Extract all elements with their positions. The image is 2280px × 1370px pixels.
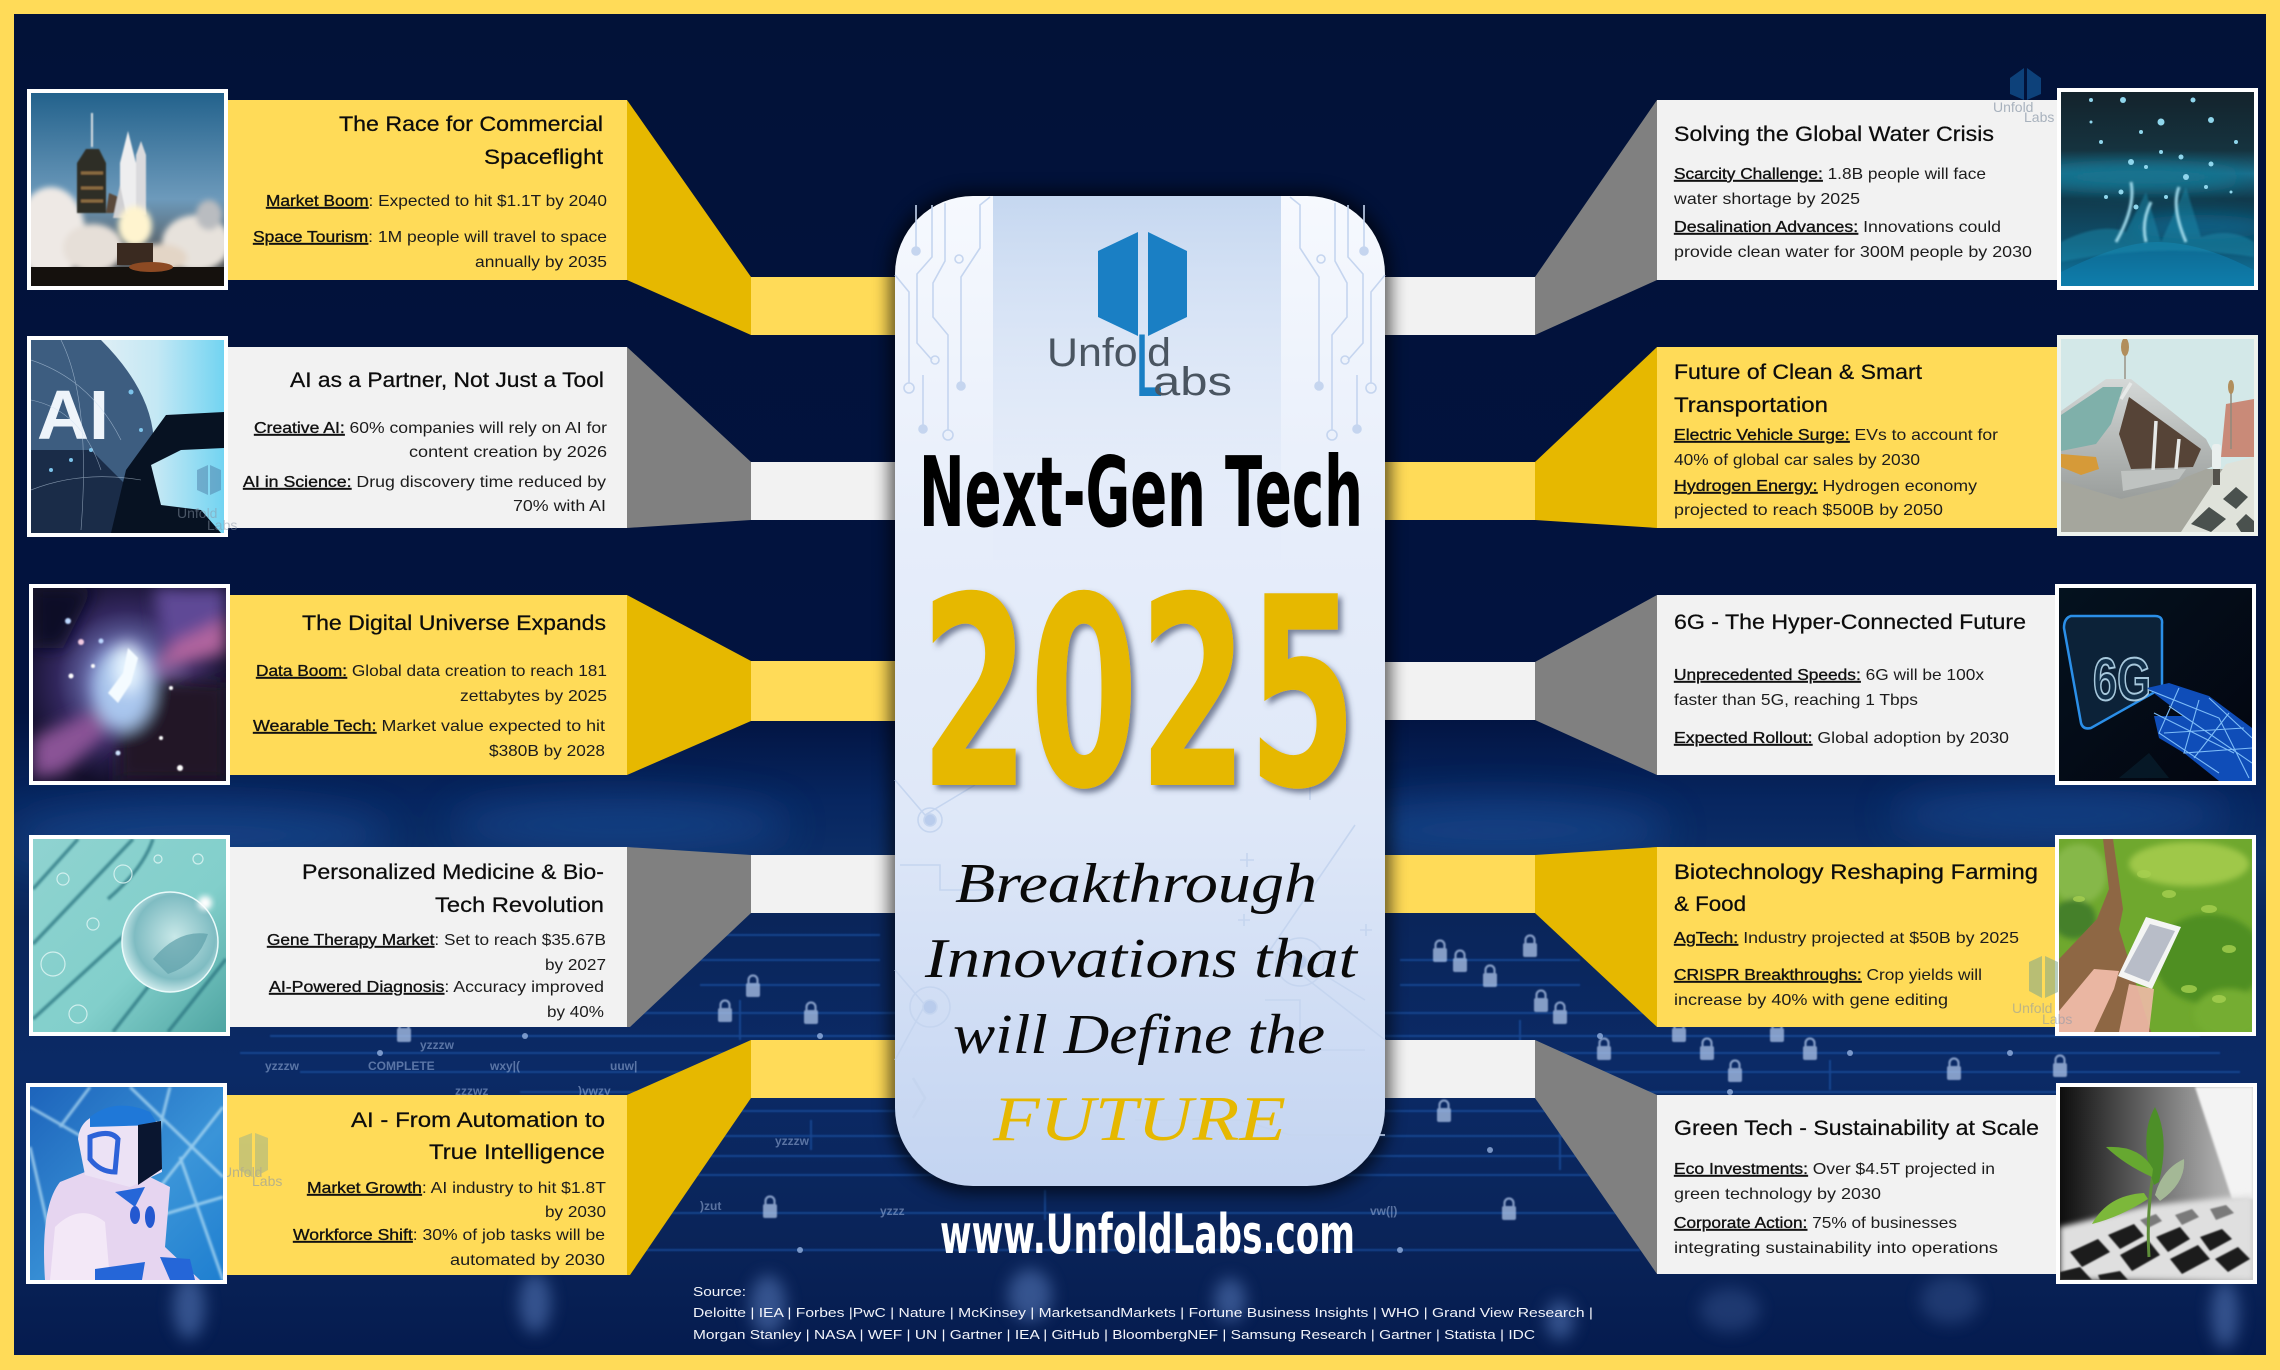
body text: faster than 5G, reaching 1 Tbps xyxy=(1674,692,1918,709)
photo: robot xyxy=(26,1083,227,1284)
body text: CRISPR Breakthroughs: Crop yields will xyxy=(1674,967,1982,984)
watermark xyxy=(2012,956,2072,1027)
photo: nebula xyxy=(29,584,230,785)
website URL: www.UnfoldLabs.com xyxy=(940,1203,1355,1266)
source credits: Deloitte | IEA | Forbes |PwC | Nature | McKinsey | MarketsandMarkets | Fortune Business Insights | WHO | Grand View Research | xyxy=(693,1305,1593,1320)
body text: Gene Therapy Market : Set to reach $35.67B xyxy=(267,932,606,949)
text panel xyxy=(1657,1095,2058,1274)
circuit decoration xyxy=(895,197,1385,1135)
body text: Workforce Shift : 30% of job tasks will be xyxy=(293,1227,605,1244)
heading xyxy=(351,1109,605,1164)
tagline: FUTURE xyxy=(992,1083,1286,1154)
panel shadow xyxy=(889,190,1391,1194)
left item 4: personalized medicine xyxy=(29,835,901,1036)
panel card xyxy=(895,196,1385,1186)
body text: by 2030 xyxy=(545,1204,606,1221)
heading: Biotechnology Reshaping Farming xyxy=(1674,861,2038,884)
photo: AI handshake: AI xyxy=(37,376,109,454)
body text xyxy=(1674,930,2019,1009)
logo wordmark: Unfold xyxy=(1047,331,1171,375)
connector funnel xyxy=(1535,347,1657,528)
body text xyxy=(253,663,607,760)
text panel xyxy=(226,100,627,280)
central panel xyxy=(889,190,1391,1194)
connector funnel xyxy=(627,1040,751,1275)
connector funnel xyxy=(627,847,751,1027)
connector bar xyxy=(1380,855,1535,913)
logo xyxy=(1047,232,1232,414)
page background with network pattern: )zut xyxy=(700,1199,721,1213)
connector funnel xyxy=(1535,847,1657,1027)
connector funnel xyxy=(1535,595,1657,775)
body text: automated by 2030 xyxy=(450,1252,605,1269)
body text: Desalination Advances: Innovations could xyxy=(1674,219,2001,236)
connector bar xyxy=(751,277,901,335)
body text xyxy=(243,420,608,515)
body text: Eco Investments: Over $4.5T projected in xyxy=(1674,1161,1995,1178)
connector bar xyxy=(1380,462,1535,520)
page background with network pattern: COMPLETE xyxy=(368,1059,435,1073)
photo: sprout on keyboard xyxy=(2056,1083,2257,1284)
text panel xyxy=(1657,595,2057,775)
source credits: Source: xyxy=(693,1284,746,1299)
watermark xyxy=(1993,68,2054,125)
body text: annually by 2035 xyxy=(475,254,607,271)
body text: Unprecedented Speeds: 6G will be 100x xyxy=(1674,667,1984,684)
heading: The Digital Universe Expands xyxy=(302,612,606,635)
logo wordmark: L xyxy=(1136,318,1162,414)
tagline xyxy=(924,853,1359,1154)
watermark: Unfold xyxy=(177,505,217,521)
body text xyxy=(267,932,606,1021)
body text xyxy=(253,193,607,271)
photo: DNA bubble xyxy=(29,835,230,1036)
right item 2: clean transport xyxy=(1380,335,2258,536)
heading: Green Tech - Sustainability at Scale xyxy=(1674,1117,2039,1140)
connector funnel xyxy=(1535,100,1657,335)
heading xyxy=(1674,861,2038,916)
watermark: Unfold xyxy=(222,1164,262,1180)
text panel xyxy=(1657,347,2059,528)
body text: Hydrogen Energy: Hydrogen economy xyxy=(1674,478,1977,495)
body text: Scarcity Challenge: 1.8B people will face xyxy=(1674,166,1986,183)
page background with network pattern: yzzz xyxy=(880,1204,905,1218)
year: 2025: 2025 xyxy=(920,542,1357,848)
watermark: Labs xyxy=(2042,1011,2072,1027)
body text: content creation by 2026 xyxy=(409,444,607,461)
heading: 6G - The Hyper-Connected Future xyxy=(1674,611,2026,634)
body text: AgTech: Industry projected at $50B by 2025 xyxy=(1674,930,2019,947)
heading: Spaceflight xyxy=(484,146,603,169)
watermark xyxy=(177,465,237,533)
connector bar xyxy=(1380,1040,1535,1098)
photo: 6G hand xyxy=(2055,584,2256,785)
watermark: Unfold xyxy=(1993,99,2033,115)
body text xyxy=(1674,427,1999,519)
watermark: Labs xyxy=(252,1173,282,1189)
photo: water splash xyxy=(2041,88,2271,290)
heading: Solving the Global Water Crisis xyxy=(1674,123,1994,146)
heading xyxy=(339,113,603,169)
right item 1: water crisis xyxy=(1380,68,2271,335)
connector funnel xyxy=(627,595,751,775)
source credits: Morgan Stanley | NASA | WEF | UN | Gartner | IEA | GitHub | BloombergNEF | Samsung Research | Gartner | Statista | IDC xyxy=(693,1327,1535,1342)
body text: zettabytes by 2025 xyxy=(460,688,607,705)
body text: Electric Vehicle Surge: EVs to account for xyxy=(1674,427,1999,444)
body text: Space Tourism : 1M people will travel to space xyxy=(253,229,607,246)
body text: increase by 40% with gene editing xyxy=(1674,992,1948,1009)
text panel xyxy=(1657,100,2059,280)
left item 2: AI as a partner xyxy=(27,336,901,537)
body text: AI-Powered Diagnosis : Accuracy improved xyxy=(269,979,604,996)
text panel xyxy=(228,847,627,1027)
connector bar xyxy=(751,855,901,913)
text panel xyxy=(229,595,627,775)
text panel xyxy=(226,347,627,528)
body text: Corporate Action: 75% of businesses xyxy=(1674,1215,1957,1232)
right item 5: green tech xyxy=(1380,1040,2257,1284)
body text: Creative AI: 60% companies will rely on AI for xyxy=(254,420,608,437)
photo: AI handshake xyxy=(27,336,228,537)
photo: tram xyxy=(2057,335,2258,536)
page background with network pattern: yzzzw xyxy=(1612,1089,1647,1103)
connector bar xyxy=(751,462,901,520)
page background with network pattern: vw(|) xyxy=(1370,1204,1397,1218)
photo: farming tablet xyxy=(2051,835,2264,1039)
connector bar xyxy=(1380,662,1535,720)
heading: & Food xyxy=(1674,893,1746,916)
body text: AI in Science: Drug discovery time reduced by xyxy=(243,474,606,491)
logo mark: hexagon halves xyxy=(1098,232,1187,336)
heading: AI - From Automation to xyxy=(351,1109,605,1132)
heading xyxy=(302,861,604,917)
connector funnel xyxy=(627,347,751,528)
body text xyxy=(1674,1161,1998,1257)
page background with network pattern: yzzzw xyxy=(775,1134,810,1148)
right item 3: 6G xyxy=(1380,584,2256,785)
heading xyxy=(1674,361,1922,417)
logo wordmark: abs xyxy=(1153,360,1232,404)
body text: green technology by 2030 xyxy=(1674,1186,1881,1203)
body text: Expected Rollout: Global adoption by 2030 xyxy=(1674,730,2009,747)
source credits xyxy=(693,1284,1593,1342)
left item 1: commercial spaceflight xyxy=(17,89,901,335)
watermark: Labs xyxy=(207,517,237,533)
body text: by 2027 xyxy=(545,957,606,974)
page background with network pattern: yzzzw xyxy=(420,1038,455,1052)
body text: Wearable Tech: Market value expected to hit xyxy=(253,718,606,735)
heading: Tech Revolution xyxy=(435,894,604,917)
tagline: will Define the xyxy=(953,1004,1325,1066)
body text xyxy=(1674,667,2009,747)
tagline: Breakthrough xyxy=(955,853,1317,915)
heading: Future of Clean & Smart xyxy=(1674,361,1922,384)
center strip xyxy=(993,196,1281,560)
page background with network pattern: )vwzy xyxy=(578,1084,611,1098)
body text: integrating sustainability into operations xyxy=(1674,1240,1998,1257)
watermark xyxy=(222,1133,282,1189)
page background with network pattern: zzzwz xyxy=(455,1084,488,1098)
left item 3: digital universe xyxy=(29,584,901,785)
body text: by 40% xyxy=(547,1004,604,1021)
heading: Personalized Medicine & Bio- xyxy=(302,861,604,884)
page background with network pattern: yzzzw xyxy=(265,1059,300,1073)
body text: 40% of global car sales by 2030 xyxy=(1674,452,1920,469)
watermark: Unfold xyxy=(2012,1000,2052,1016)
body text: provide clean water for 300M people by 2030 xyxy=(1674,244,2032,261)
text panel xyxy=(225,1095,627,1275)
logo wordmark xyxy=(1047,318,1232,414)
connector funnel xyxy=(627,100,751,335)
page background with network pattern: uuw| xyxy=(610,1059,637,1073)
body text: projected to reach $500B by 2050 xyxy=(1674,502,1943,519)
watermark: Labs xyxy=(2024,109,2054,125)
heading: AI as a Partner, Not Just a Tool xyxy=(290,369,604,392)
body text xyxy=(293,1180,606,1269)
photo: 6G hand: 6G xyxy=(2093,646,2151,713)
body text: 70% with AI xyxy=(513,498,606,515)
body text: Data Boom: Global data creation to reach 181 xyxy=(256,663,607,680)
connector bar xyxy=(1380,277,1535,335)
title: Next-Gen Tech: Next-Gen Tech xyxy=(919,436,1363,549)
body text: Market Boom : Expected to hit $1.1T by 2040 xyxy=(266,193,607,210)
heading: The Race for Commercial xyxy=(339,113,603,136)
right item 4: biotechnology farming xyxy=(1380,835,2264,1039)
text panel xyxy=(1657,847,2057,1027)
heading: True Intelligence xyxy=(429,1141,605,1164)
connector bar xyxy=(751,1040,901,1098)
heading: Transportation xyxy=(1674,394,1828,417)
connector funnel xyxy=(1535,1040,1657,1274)
body text: water shortage by 2025 xyxy=(1673,191,1860,208)
page background with network pattern: wxy|( xyxy=(489,1059,520,1073)
left item 5: AI automation xyxy=(26,1040,901,1284)
body text xyxy=(1673,166,2032,261)
connector bar xyxy=(751,661,901,721)
body text: $380B by 2028 xyxy=(489,743,605,760)
tagline: Innovations that xyxy=(924,928,1359,990)
photo: rocket launch xyxy=(17,89,230,290)
body text: Market Growth : AI industry to hit $1.8T xyxy=(307,1180,606,1197)
